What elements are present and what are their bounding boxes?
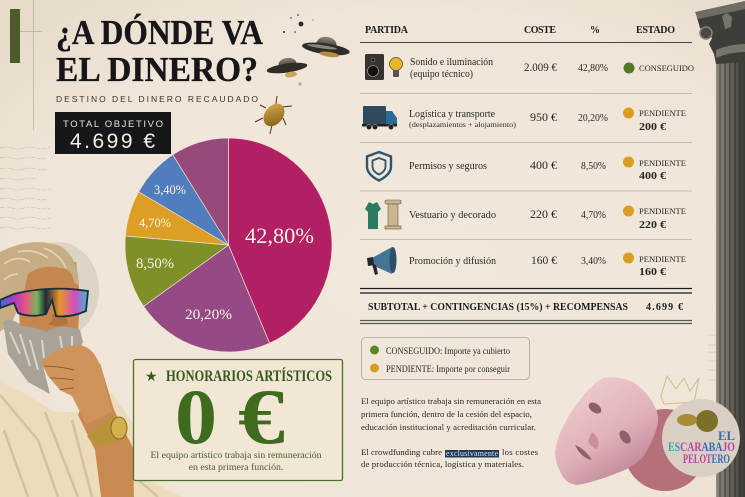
philosopher illustration	[0, 242, 182, 497]
row: vestuario y decorado: 220 €	[530, 209, 557, 221]
sunglasses	[0, 289, 88, 316]
beard highlights	[10, 332, 72, 370]
slice: sonido 42,80%	[228, 138, 332, 343]
explanatory text	[361, 396, 541, 469]
row: logística y transporte: (desplazamientos + alojamiento)	[409, 120, 516, 129]
title: ¿A DÓNDE VA	[56, 12, 264, 52]
accent bar and crosshair	[10, 0, 42, 130]
big zero euro value: 0	[175, 373, 217, 460]
explanatory text: exclusivamente	[446, 449, 498, 458]
table header: COSTE	[524, 25, 556, 36]
capital	[696, 3, 745, 64]
logo: el escarabajo pelotero: EL	[718, 428, 735, 443]
slice: promoción 3,40%	[139, 155, 228, 245]
explanatory text: El crowdfunding cubre	[361, 447, 442, 457]
slice: logística 20,20%	[144, 245, 270, 352]
pie chart	[125, 138, 332, 352]
face	[18, 262, 80, 345]
row: promoción y difusión	[367, 247, 686, 278]
legend: PENDIENTE: Importe por conseguir	[386, 364, 510, 374]
explanatory text: primera función, dentro de la cesión del espacio,	[361, 409, 532, 419]
icon: flying saucer small	[265, 55, 309, 81]
pie labels	[136, 183, 314, 323]
explanatory text: educación institucional y acreditación curricular.	[361, 422, 536, 432]
row: logística y transporte: 950 €	[530, 112, 557, 124]
nose	[48, 312, 68, 326]
slice: otros	[173, 138, 228, 245]
column illustration	[695, 1, 745, 497]
icon: light bulb	[390, 58, 402, 77]
big zero euro value: €	[238, 373, 285, 460]
toga	[0, 382, 182, 497]
subtotal row: SUBTOTAL + CONTINGENCIAS (15%) + RECOMPENSAS	[368, 302, 628, 313]
fingers	[44, 366, 74, 390]
row: promoción y difusión: PENDIENTE	[639, 255, 686, 264]
total objective box: 4.699 €	[70, 130, 155, 153]
row: logística y transporte: 20,20%	[578, 112, 608, 124]
table header: PARTIDA	[365, 25, 409, 36]
row: sonido e iluminación: Sonido e iluminación	[410, 57, 494, 68]
legend: CONSEGUIDO: Importe ya cubierto	[386, 346, 510, 356]
sketched crown	[661, 376, 699, 404]
arm	[78, 363, 134, 497]
row: vestuario y decorado: 220 €	[639, 219, 667, 231]
pie labels: 20,20%	[185, 306, 232, 323]
pie labels: 42,80%	[245, 223, 314, 248]
title: EL DINERO?	[56, 50, 258, 89]
hair strands	[4, 248, 66, 280]
table header: ESTADO	[636, 25, 675, 36]
row: sonido e iluminación: 42,80%	[578, 62, 608, 74]
row: promoción y difusión: 160 €	[639, 266, 667, 278]
subtitle: DESTINO DEL DINERO RECAUDADO	[56, 94, 258, 104]
hair	[0, 242, 79, 332]
title	[56, 12, 264, 89]
row: permisos y seguros: 400 €	[530, 160, 557, 172]
table rules	[360, 42, 692, 324]
icon: flying saucer large	[301, 34, 351, 60]
row: permisos y seguros: 8,50%	[581, 160, 606, 172]
icon: golden beetle	[255, 96, 292, 134]
big zero euro value	[175, 373, 285, 460]
row: sonido e iluminación: CONSEGUIDO	[639, 64, 694, 73]
row: permisos y seguros: 400 €	[639, 170, 667, 182]
table header	[365, 25, 675, 36]
explanatory text: de producción técnica, logística y materiales.	[361, 459, 524, 469]
capital leaves	[716, 13, 745, 58]
row: logística y transporte: 200 €	[639, 121, 667, 133]
panel description: en esta primera función.	[189, 462, 283, 473]
row: permisos y seguros: Permisos y seguros	[409, 161, 487, 172]
toga folds	[0, 395, 158, 497]
icon: star: ★	[145, 370, 158, 385]
row: vestuario y decorado	[365, 200, 686, 231]
legend	[362, 338, 530, 380]
halo	[17, 242, 99, 338]
panel description: El equipo artístico trabaja sin remuneración	[150, 450, 322, 461]
capital volute	[700, 27, 712, 39]
mask illustration	[555, 378, 658, 485]
beard	[3, 320, 83, 394]
mask eyes and mouth	[575, 400, 633, 460]
explanatory text: El equipo artístico trabaja sin remuneración en esta	[361, 396, 541, 406]
total objective box: TOTAL OBJETIVO	[63, 119, 163, 130]
logo: el escarabajo pelotero: ESCARABAJO	[668, 439, 735, 454]
handwritten notes by column	[708, 335, 717, 380]
pie labels: 3,40%	[154, 183, 186, 197]
handwritten manuscript notes left	[0, 147, 51, 229]
pink circle backdrop	[624, 409, 706, 491]
panel heading: HONORARIOS ARTÍSTICOS	[166, 368, 332, 385]
total objective box	[55, 112, 171, 154]
row: permisos y seguros: PENDIENTE	[639, 159, 686, 168]
pie labels: 4,70%	[139, 216, 171, 230]
row: sonido e iluminación: (equipo técnico)	[410, 69, 473, 80]
icon: truck	[362, 106, 397, 130]
pie labels: 8,50%	[136, 256, 174, 272]
row: promoción y difusión: Promoción y difusión	[409, 256, 497, 267]
row: vestuario y decorado: PENDIENTE	[639, 207, 686, 216]
row: vestuario y decorado: Vestuario y decorado	[409, 210, 496, 221]
icon: shield	[367, 152, 391, 180]
row: promoción y difusión: 160 €	[531, 255, 557, 267]
slice: vestuario 4,70%	[125, 192, 228, 245]
row: vestuario y decorado: 4,70%	[581, 209, 606, 221]
icon: small column	[385, 200, 401, 229]
row: promoción y difusión: 3,40%	[581, 255, 606, 267]
row: logística y transporte	[362, 106, 686, 133]
subtotal row: 4.699 €	[646, 302, 683, 313]
row: logística y transporte: PENDIENTE	[639, 109, 686, 118]
row: permisos y seguros	[367, 152, 686, 182]
hand	[41, 345, 112, 424]
logo: el escarabajo pelotero: PELOTERO	[683, 451, 730, 466]
logo: el escarabajo pelotero	[662, 399, 740, 477]
decorative ink splatter	[283, 14, 314, 86]
panel description	[150, 450, 322, 473]
row: sonido e iluminación	[365, 54, 694, 80]
column flutes	[720, 62, 740, 497]
capital abacus	[695, 1, 745, 19]
panel: honorarios artísticos	[134, 360, 342, 480]
explanatory text: los costes	[502, 447, 539, 457]
row: logística y transporte: Logística y transporte	[409, 109, 495, 120]
icon: green dress	[365, 202, 381, 229]
table header: %	[590, 25, 600, 36]
icon: speaker	[365, 54, 384, 80]
watch	[87, 415, 127, 447]
row: sonido e iluminación: 2.009 €	[524, 62, 557, 74]
icon: megaphone	[367, 247, 396, 275]
slice: permisos 8,50%	[125, 236, 228, 306]
